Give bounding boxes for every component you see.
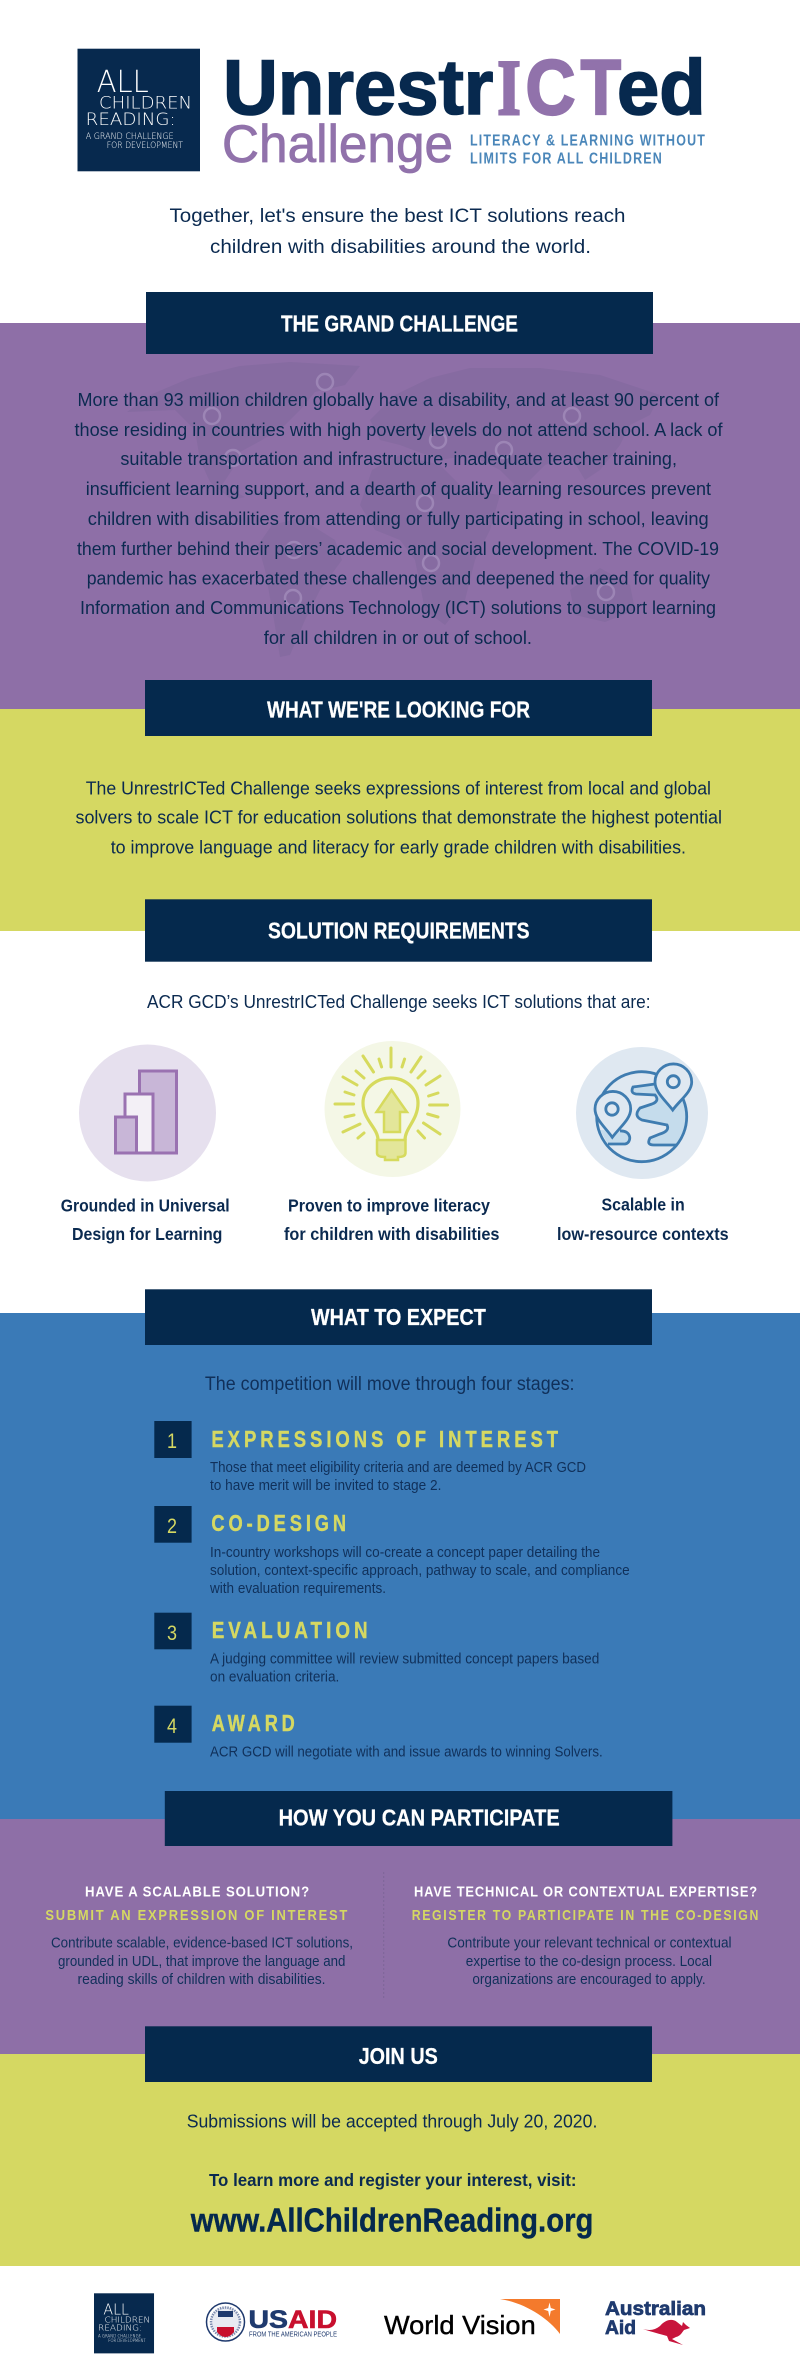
body text: to improve language and literacy for early grade children with disabilities.	[111, 836, 686, 857]
stage 2	[154, 1506, 630, 1597]
stage title: EVALUATION	[212, 1617, 372, 1643]
stage description: A judging committee will review submitted concept papers based	[210, 1650, 599, 1667]
world map watermark	[127, 362, 660, 657]
stage title: AWARD	[212, 1710, 299, 1736]
heading: the grand challenge: THE GRAND CHALLENGE	[281, 311, 518, 337]
partner logos	[94, 2293, 706, 2353]
body text	[74, 389, 723, 648]
body text: More than 93 million children globally have a disability, and at least 90 percent of	[78, 389, 720, 410]
stage 3	[154, 1613, 599, 1685]
title: UnrestrICTed: I	[498, 44, 520, 131]
column: scalable solution: grounded in UDL, that improve the language and	[58, 1953, 345, 1970]
tagline: LIMITS FOR ALL CHILDREN	[470, 150, 663, 167]
stage title: CO-DESIGN	[211, 1510, 350, 1536]
stage description: to have merit will be invited to stage 2.	[210, 1477, 441, 1494]
stage 1	[154, 1421, 586, 1494]
logo: All Children Reading: A GRAND CHALLENGE	[86, 132, 174, 142]
icon: bar chart	[79, 1044, 216, 1182]
title: UnrestrICTed	[223, 43, 706, 131]
stage description: with evaluation requirements.	[209, 1580, 386, 1597]
intro text: children with disabilities around the world.	[210, 237, 591, 258]
requirements intro: ACR GCD’s UnrestrICTed Challenge seeks ICT solutions that are:	[147, 991, 650, 1012]
label: Grounded in Universal	[61, 1196, 230, 1216]
logo: All Children Reading small: CHILDREN	[105, 2315, 150, 2325]
heading: solution requirements	[145, 899, 652, 962]
heading: join us: JOIN US	[359, 2043, 438, 2069]
deadline: Submissions will be accepted through July 20, 2020.	[187, 2110, 597, 2131]
heading: what to expect: WHAT TO EXPECT	[311, 1304, 486, 1330]
icon: light bulb	[324, 1041, 460, 1177]
number badge: 2	[167, 1515, 177, 1538]
label: Proven to improve literacy	[288, 1196, 490, 1216]
intro text: Together, let's ensure the best ICT solutions reach	[170, 206, 626, 227]
logo: All Children Reading: FOR DEVELOPMENT	[107, 141, 183, 151]
stage title: EXPRESSIONS OF INTEREST	[211, 1426, 562, 1452]
logo: All Children Reading small: A GRAND CHALLENGE	[98, 2334, 141, 2339]
logo: USAID	[206, 2303, 337, 2341]
body text: solvers to scale ICT for education solutions that demonstrate the highest potential	[76, 806, 722, 827]
body text: children with disabilities from attending or fully participating in school, leaving	[88, 508, 709, 529]
label: low-resource contexts	[557, 1224, 729, 1244]
icon: globe with map pins	[576, 1047, 708, 1179]
body text: Information and Communications Technology (ICT) solutions to support learning	[80, 597, 716, 618]
stage description: In-country workshops will co-create a concept paper detailing the	[210, 1544, 600, 1561]
body text: The UnrestrICTed Challenge seeks expressions of interest from local and global	[86, 777, 711, 798]
column: scalable solution: reading skills of children with disabilities.	[78, 1971, 326, 1988]
logo: World Vision: World Vision	[384, 2310, 536, 2340]
panel: how you can participate	[0, 1791, 800, 2054]
logo: All Children Reading	[78, 49, 200, 171]
label: for children with disabilities	[284, 1224, 500, 1244]
header: logos and title	[78, 43, 706, 174]
label	[284, 1196, 500, 1244]
column: scalable solution: HAVE A SCALABLE SOLUTION?	[85, 1884, 310, 1901]
logo: All Children Reading: ALL	[97, 65, 149, 100]
stage description: on evaluation criteria.	[210, 1668, 339, 1685]
call to action: To learn more and register your interest, visit:	[209, 2170, 576, 2190]
icon: kangaroo	[643, 2320, 690, 2345]
heading: how you can participate: HOW YOU CAN PARTICIPATE	[279, 1804, 560, 1830]
number badge	[154, 1706, 192, 1743]
stage description	[210, 1459, 586, 1494]
requirement: scalable	[557, 1047, 729, 1244]
body text	[76, 777, 722, 857]
tagline	[470, 133, 706, 167]
number badge	[154, 1506, 192, 1543]
logo: World Vision	[384, 2299, 560, 2340]
column: technical expertise: expertise to the co-design process. Local	[466, 1953, 712, 1970]
logo: All Children Reading small: READING:	[98, 2323, 142, 2333]
logo: Australian Aid: Aid	[605, 2318, 636, 2339]
logo: All Children Reading: CHILDREN	[99, 94, 192, 114]
heading: what we're looking for: WHAT WE'RE LOOKING FOR	[267, 697, 530, 723]
panel: the grand challenge	[0, 292, 800, 709]
column: technical expertise	[412, 1884, 760, 1988]
title: Challenge: Challenge	[222, 115, 453, 174]
stage description: ACR GCD will negotiate with and issue awards to winning Solvers.	[210, 1743, 603, 1760]
label	[61, 1196, 230, 1244]
logo: All Children Reading small	[94, 2293, 154, 2353]
requirement: proven literacy	[284, 1041, 500, 1244]
requirement: universal design	[61, 1044, 230, 1244]
logo: Australian Aid: Australian	[605, 2299, 706, 2320]
website: www.AllChildrenReading.org	[190, 2202, 593, 2239]
body text: suitable transportation and infrastructure, inadequate teacher training,	[120, 448, 677, 469]
logo: All Children Reading: READING:	[86, 110, 176, 130]
column: scalable solution	[45, 1884, 353, 1988]
body text: those residing in countries with high poverty levels do not attend school. A lack of	[74, 419, 723, 440]
number badge	[154, 1613, 192, 1649]
number badge: 3	[167, 1622, 177, 1645]
label: Design for Learning	[72, 1224, 222, 1244]
column: scalable solution: Contribute scalable, evidence-based ICT solutions,	[51, 1935, 353, 1952]
stage description	[210, 1650, 599, 1685]
column: technical expertise: organizations are encouraged to apply.	[472, 1971, 706, 1988]
heading: how you can participate	[165, 1791, 672, 1846]
column: technical expertise: Contribute your relevant technical or contextual	[447, 1935, 732, 1952]
heading: join us	[145, 2026, 652, 2082]
body text: them further behind their peers’ academic and social development. The COVID-19	[77, 538, 719, 559]
stage description: solution, context-specific approach, pathway to scale, and compliance	[210, 1562, 630, 1579]
panel: solution requirements	[61, 899, 729, 1244]
tagline: LITERACY & LEARNING WITHOUT	[470, 133, 706, 150]
panel: what to expect	[0, 1289, 800, 1819]
heading: what we're looking for	[145, 680, 652, 736]
body text: for all children in or out of school.	[264, 627, 532, 648]
label	[557, 1195, 729, 1244]
panel: join us	[0, 2026, 800, 2266]
title: UnrestrICTed: Unrestr	[223, 43, 493, 131]
heading: what to expect	[145, 1289, 652, 1345]
title: UnrestrICTed: ed	[617, 43, 706, 131]
number badge: 4	[167, 1715, 177, 1738]
logo: USAID: FROM THE AMERICAN PEOPLE	[249, 2330, 337, 2339]
stage 4	[154, 1706, 603, 1760]
logo: Australian Aid	[605, 2299, 706, 2345]
intro text	[170, 206, 626, 258]
number badge	[154, 1421, 192, 1458]
panel: what we're looking for	[0, 680, 800, 931]
number badge: 1	[167, 1430, 177, 1453]
heading: the grand challenge	[146, 292, 653, 354]
logo: USAID: USAID	[248, 2306, 337, 2334]
stage description	[209, 1544, 630, 1597]
logo: All Children Reading small: ALL	[103, 2302, 129, 2319]
stage description: Those that meet eligibility criteria and are deemed by ACR GCD	[210, 1459, 586, 1476]
column: scalable solution: SUBMIT AN EXPRESSION OF INTEREST	[45, 1907, 349, 1924]
title: UnrestrICTed: C	[526, 43, 576, 131]
body text: pandemic has exacerbated these challenges and deepened the need for quality	[87, 567, 711, 588]
heading: solution requirements: SOLUTION REQUIREMENTS	[268, 917, 530, 943]
body text: insufficient learning support, and a dearth of quality learning resources prevent	[86, 478, 711, 499]
stages intro: The competition will move through four stages:	[205, 1374, 574, 1395]
label: Scalable in	[602, 1195, 685, 1215]
title: UnrestrICTed: T	[581, 43, 621, 131]
logo: All Children Reading small: FOR DEVELOPMENT	[108, 2338, 146, 2343]
